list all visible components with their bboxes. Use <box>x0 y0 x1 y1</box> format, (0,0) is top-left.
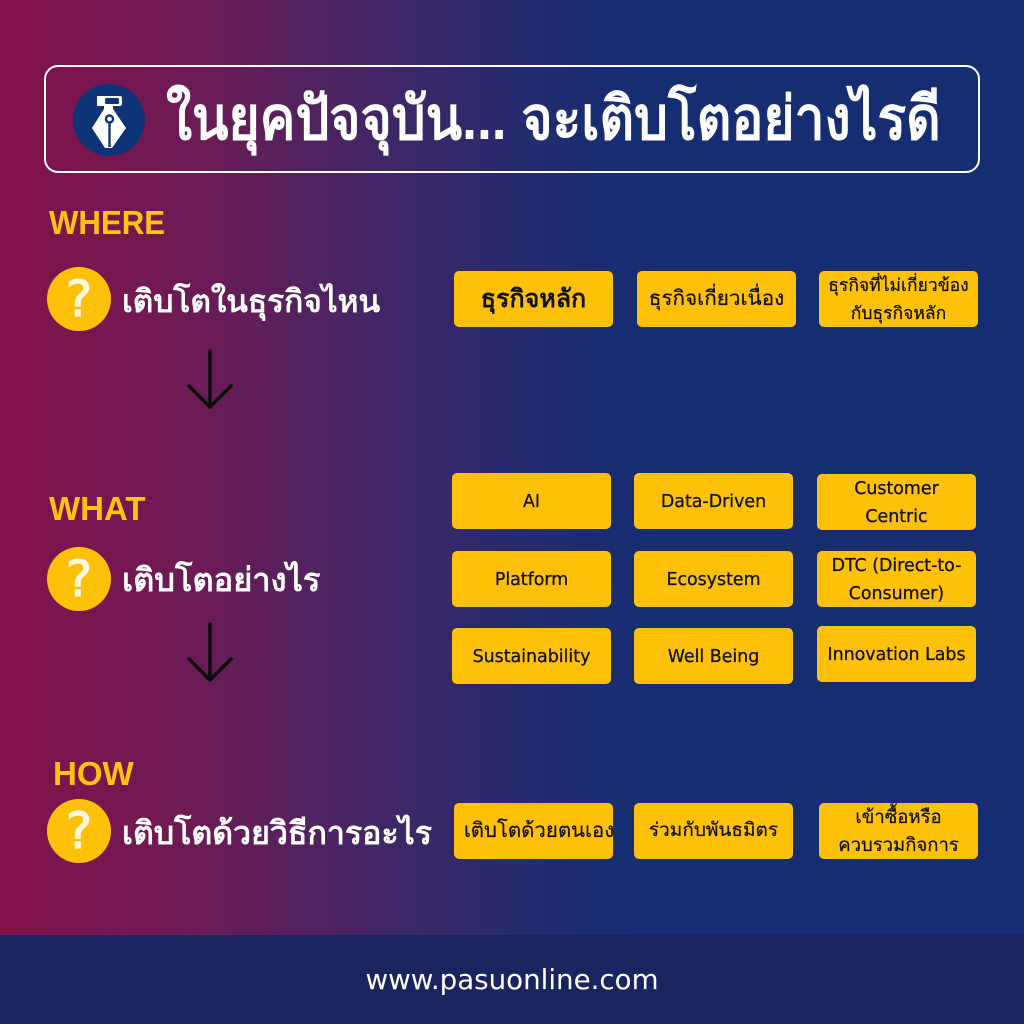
icon: question mark: ? <box>66 802 92 860</box>
question text: where: เติบโตในธุรกิจไหน <box>122 283 380 319</box>
icon: question mark: ? <box>66 270 92 328</box>
option: organic growth <box>454 803 613 859</box>
title banner <box>44 65 980 173</box>
icon: question mark <box>47 799 111 863</box>
option: unrelated business: ธุรกิจที่ไม่เกี่ยวข้อง กับธุรกิจหลัก <box>828 275 969 323</box>
option: partners <box>634 803 793 859</box>
option: Platform: Platform <box>495 570 568 590</box>
option: Data-Driven: Data-Driven <box>661 492 766 512</box>
option: DTC: DTC (Direct-to- Consumer) <box>832 556 961 604</box>
option: Customer Centric <box>817 474 976 530</box>
option: organic growth: เติบโตด้วยตนเอง <box>464 820 614 842</box>
option: AI <box>452 473 611 529</box>
question text: how: เติบโตด้วยวิธีการอะไร <box>122 815 432 851</box>
option: Innovation Labs: Innovation Labs <box>827 644 966 664</box>
option: Customer Centric: Customer Centric <box>854 478 939 526</box>
option: related business <box>637 271 796 327</box>
icon: question mark: ? <box>66 550 92 608</box>
option: Data-Driven <box>634 473 793 529</box>
option: Well Being <box>634 628 793 684</box>
footer bar <box>0 935 1024 1024</box>
option: Ecosystem <box>634 551 793 607</box>
option: Ecosystem: Ecosystem <box>666 570 761 590</box>
arrow: what to how <box>187 622 233 682</box>
footer url: www.pasuonline.com <box>365 963 659 996</box>
option: M&A <box>819 803 978 859</box>
option: related business: ธุรกิจเกี่ยวเนื่อง <box>649 287 784 310</box>
question text: what: เติบโตอย่างไร <box>122 561 320 598</box>
title text: ในยุคปัจจุบัน... จะเติบโตอย่างไรดี <box>166 85 941 152</box>
option: core business: ธุรกิจหลัก <box>481 285 586 313</box>
arrow: where to what <box>187 349 233 409</box>
logo: fountain pen nib <box>73 84 145 156</box>
option: Well Being: Well Being <box>668 646 759 666</box>
option: AI: AI <box>523 492 540 512</box>
option: M&A: เข้าซื้อหรือ ควบรวมกิจการ <box>838 806 959 855</box>
heading: WHAT: WHAT <box>49 490 146 527</box>
option: Platform <box>452 551 611 607</box>
option: Sustainability <box>452 628 611 684</box>
icon: question mark <box>47 267 111 331</box>
option: Innovation Labs <box>817 626 976 682</box>
icon: question mark <box>47 547 111 611</box>
option: core business <box>454 271 613 327</box>
option: partners: ร่วมกับพันธมิตร <box>649 820 778 841</box>
option: Sustainability: Sustainability <box>473 646 590 666</box>
heading: WHERE: WHERE <box>49 204 165 241</box>
heading: HOW: HOW <box>53 755 134 792</box>
